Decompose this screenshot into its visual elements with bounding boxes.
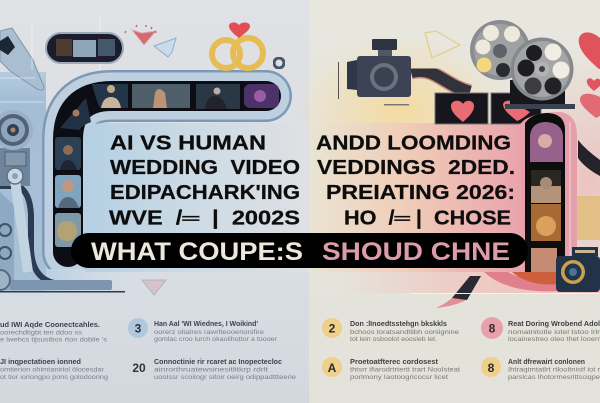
film tail bottom xyxy=(436,276,481,308)
title block right xyxy=(316,132,515,230)
icon: side heart xyxy=(580,94,600,118)
title line: ANDD LOOMDING: ANDD LOOMDING xyxy=(316,132,511,154)
bottom item: number 8 pink: Reat Doring Wrobend Adol xyxy=(508,319,600,328)
thumbnail: vertical photo 2 xyxy=(55,175,81,208)
bottom item: number 8 pink: 8 xyxy=(489,322,496,336)
bottom item: left column second: ot tior ioriongpo pons golodooring xyxy=(0,374,108,381)
icon: heart diamond xyxy=(125,25,156,45)
thumbnail: strip photo 5 xyxy=(60,98,91,130)
bottom item: number 20 xyxy=(129,357,296,381)
icon: lower cog two xyxy=(0,247,11,259)
pill thumbnail three xyxy=(98,39,115,56)
icon: bottom cog xyxy=(0,270,10,290)
film frame with heart left xyxy=(435,93,488,124)
title line: AI VS HUMAN: AI VS HUMAN xyxy=(110,132,266,154)
bottom item: letter A: A xyxy=(328,361,337,375)
bottom item: number 8 gold xyxy=(481,357,600,381)
icon: lower diamond xyxy=(142,280,166,295)
decorative thin lines xyxy=(0,15,100,102)
bottom item: left column first: e lwehcs tijsusibos rton dobile 's xyxy=(0,336,108,344)
title line: VEDDINGS 2DED.: VEDDINGS 2DED. xyxy=(317,157,515,179)
icon: machine pillar xyxy=(0,148,30,186)
machine bottom bar xyxy=(10,280,112,290)
pill thumbnail one xyxy=(56,39,72,56)
icon: lower cog one xyxy=(0,224,11,236)
thumbnail: vertical photo 1 xyxy=(55,137,81,170)
machine dark band xyxy=(0,186,112,284)
left side machinery xyxy=(0,110,125,292)
icon: small gear xyxy=(7,168,23,184)
title line: WWE 2002S: WVE /═ | 2002S xyxy=(109,208,300,230)
left background xyxy=(0,0,309,403)
bottom item: number 3: gomlac croo lurch okaolihottor a toooer xyxy=(154,336,278,343)
left machinery blue base xyxy=(0,72,46,292)
title block left xyxy=(109,132,300,230)
bottom item: number 2: 2 xyxy=(329,322,336,336)
icon: blue diamond xyxy=(154,38,176,57)
bottom item: number 8 gold: 8 xyxy=(488,361,495,375)
icon: machine plate xyxy=(5,152,26,166)
thumbnail: strip photo 1 xyxy=(132,84,190,108)
title line: EDIPACHARK'ING: EDIPACHARK'ING xyxy=(110,182,300,204)
bottom item: number 3: 3 xyxy=(135,322,142,336)
bottom item: number 3: Han Aal 'WI Wiednes, I Woikind' xyxy=(154,319,258,328)
right strip photo: flowers xyxy=(531,248,557,272)
bottom item: letter A: thtsrr ifiarodrtrtertt trart NooIsteat xyxy=(350,366,460,374)
film frame with heart right xyxy=(491,93,541,124)
icon: gold rings xyxy=(212,38,263,68)
left lower panel fade xyxy=(46,262,156,292)
bottom item: number 2: bchoos toratsandtlibh ooniignine xyxy=(350,329,459,336)
film tail right xyxy=(578,140,600,176)
bottom item: number 2: tot lein osboolot eoosleb let. xyxy=(350,336,437,343)
headline: SHOUD CHNE: SHOUD CHNE xyxy=(322,238,510,266)
bottom item: number 8 pink: nomatnitotle iotel tstoo lrlr xyxy=(508,329,600,336)
bottom item: left column first xyxy=(0,320,108,344)
horizontal light line xyxy=(410,293,600,294)
bottom item: letter A: Proetoatfterec cordosest xyxy=(350,357,439,366)
bottom item: number 8 gold: Anlt dfrewairt conlonen xyxy=(508,357,585,366)
icon: concentric gear xyxy=(0,110,33,150)
icon: red heart xyxy=(229,22,250,38)
right background xyxy=(309,0,600,403)
projector base xyxy=(505,104,575,109)
black headline pill xyxy=(71,233,528,268)
icon: small heart xyxy=(587,78,600,91)
bottom item: letter A: porlmony Iaotoogricocsr licet xyxy=(350,374,448,381)
icon: machine strut xyxy=(15,180,28,272)
headline: WHAT COUPE:S: WHAT COUPE:S xyxy=(91,238,303,266)
bottom ribbons xyxy=(484,272,560,291)
thumbnail: strip photo 3 xyxy=(244,84,279,108)
bottom item: number 20: ainrorthruatewsinesitlitkrp rdrlt xyxy=(154,366,268,374)
bottom item: left column first: oorechdtigbt ten ddoo ss xyxy=(0,330,83,336)
bottom item: left column first: ud IWI Aqde Coonectcahles. xyxy=(0,320,100,329)
icon: gold envelope xyxy=(425,31,460,58)
bottom item: number 8 pink: locainestreo oleo thet looerr xyxy=(508,336,600,343)
top small film pill xyxy=(46,33,123,63)
bottom item: left column second: JI inqpectatioen ionned xyxy=(0,357,81,366)
bottom item: letter A xyxy=(322,357,460,381)
icon: film reel back xyxy=(470,20,530,80)
machine body xyxy=(0,192,14,290)
left mechanical film frame xyxy=(55,84,279,252)
title line: HO CHOSE: HO /═ | CHOSE xyxy=(344,208,511,230)
right strip photo: glow xyxy=(531,170,561,203)
right strip photo: woman xyxy=(530,122,563,162)
machine bottom line xyxy=(0,291,125,292)
bottom item: number 20: 20 xyxy=(132,361,146,375)
bottom item: number 20: uoolssr scoilogr sitoir oeirg odippadttteerie xyxy=(154,374,296,381)
right film frame xyxy=(520,112,600,278)
icon: video camera xyxy=(338,39,411,106)
right strip photo: candles xyxy=(531,204,561,241)
bottom item: number 2 xyxy=(322,318,459,343)
icon: film reel front xyxy=(510,38,574,100)
left title panel xyxy=(85,123,309,272)
thumbnail: vertical photo 3 xyxy=(55,213,81,247)
title line: PREIATING 2026:: PREIATING 2026: xyxy=(326,182,515,204)
right pink glow xyxy=(510,50,600,310)
bottom item: left column second xyxy=(0,357,108,381)
bottom item: number 20: Connoctinie rir rcaret ac Inopectecloc xyxy=(154,357,282,366)
bottom item: number 8 gold: parslcas Ihotormesrittsciqpe xyxy=(508,374,600,381)
bottom item: left column second: omtierion ohimtaniriol ölocesdar xyxy=(0,366,105,374)
bottom item: number 2: Don :lInoedtsstehgn bkskkls xyxy=(350,319,447,328)
gold roses xyxy=(577,196,600,240)
film ribbon xyxy=(411,71,470,92)
icon: projector device xyxy=(0,28,44,90)
bottom item: number 3 xyxy=(128,318,278,343)
bottom item: number 3: oorerz oliatres rawrlteooenonifire xyxy=(154,329,264,336)
pill thumbnail two xyxy=(73,40,96,57)
projector dark body xyxy=(510,80,565,104)
icon: large heart xyxy=(579,32,600,69)
icon: round knob xyxy=(274,58,284,68)
thumbnail: strip photo 2 xyxy=(196,84,240,109)
right lower pink fade xyxy=(340,268,600,293)
bottom item: number 8 gold: Ihtraqtmtatlrt rtlooltnistf iot r xyxy=(508,366,600,374)
icon: bottom right camera xyxy=(556,247,600,292)
thumbnail: strip photo 4 xyxy=(92,84,128,108)
title line: WEDDING VIDEO: WEDDING VIDEO xyxy=(110,157,300,179)
right warm glow xyxy=(295,35,505,185)
right title panel xyxy=(309,123,523,272)
bottom item: number 8 pink xyxy=(481,317,600,343)
